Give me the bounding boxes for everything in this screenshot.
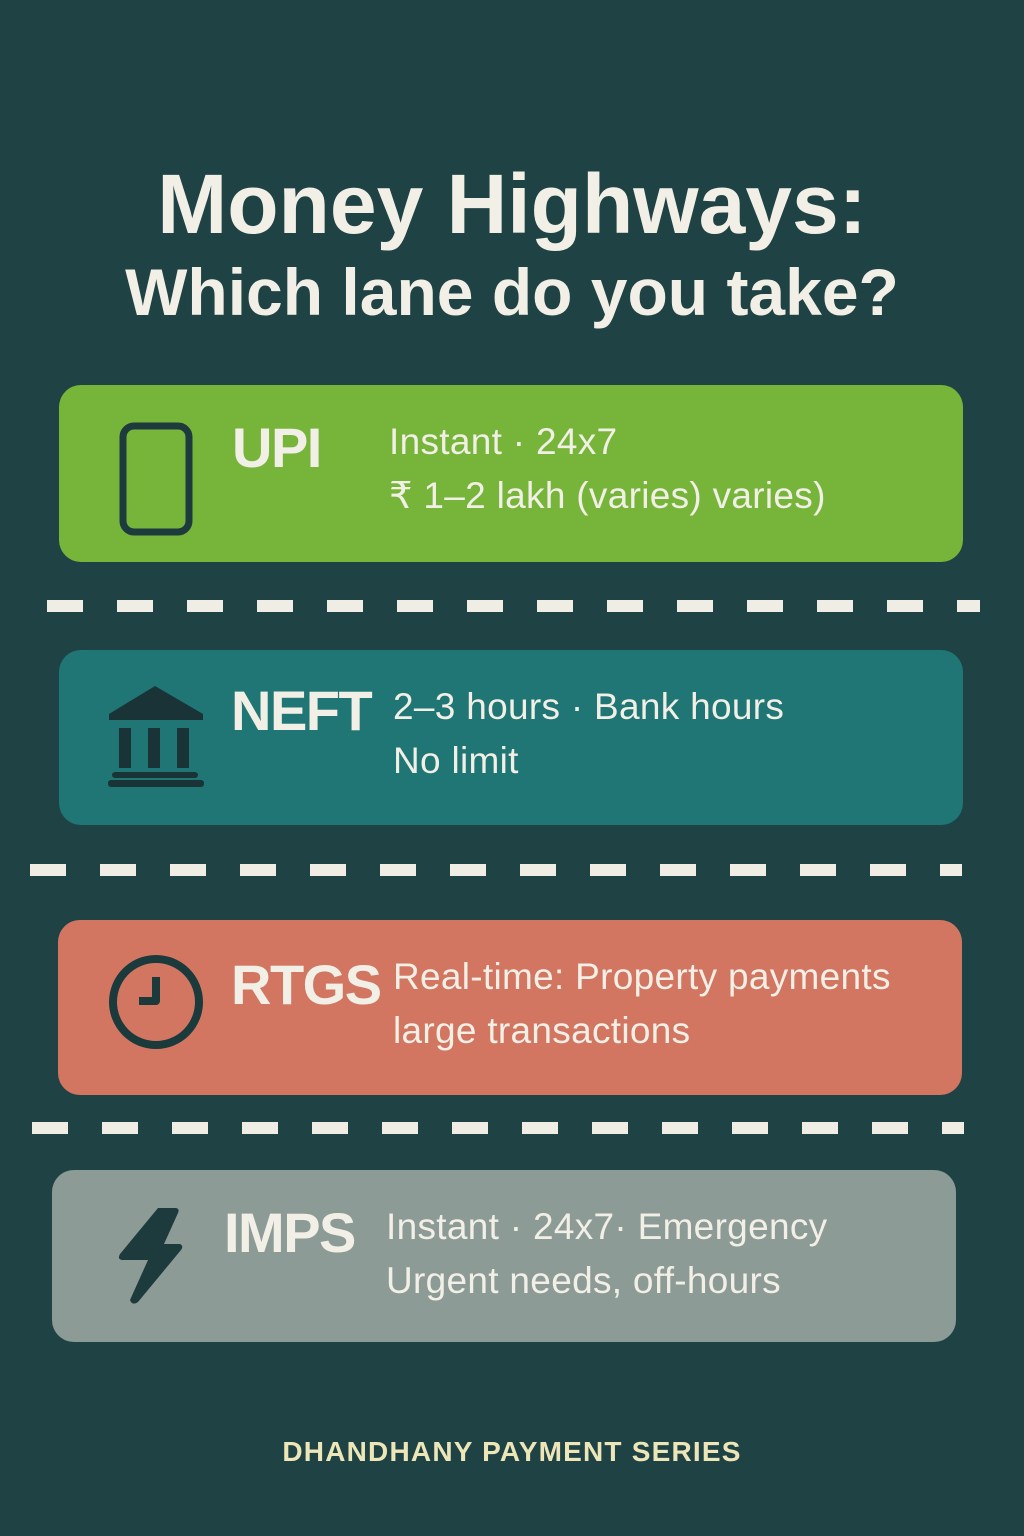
icon: phone [120, 422, 192, 536]
road dashes [32, 1122, 964, 1134]
title: Which lane do you take? [125, 255, 899, 329]
details NEFT [393, 686, 784, 781]
details RTGS [393, 956, 891, 1051]
label IMPS: IMPS [224, 1201, 355, 1264]
icon: clock [109, 955, 203, 1049]
road dashes [47, 600, 980, 612]
panel: UPI [59, 385, 963, 562]
details UPI: ₹ 1–2 lakh (varies) varies) [389, 475, 826, 516]
details NEFT: 2–3 hours · Bank hours [393, 686, 784, 727]
details RTGS: Real-time: Property payments [393, 956, 891, 997]
label NEFT: NEFT [231, 679, 371, 742]
details IMPS [386, 1206, 827, 1301]
title: Money Highways: [157, 157, 867, 251]
title [125, 157, 899, 329]
details UPI: Instant · 24x7 [389, 421, 617, 462]
road dashes [30, 864, 962, 876]
footer: DHANDHANY PAYMENT SERIES [282, 1436, 742, 1467]
panel: IMPS [52, 1170, 956, 1342]
details NEFT: No limit [393, 740, 519, 781]
details UPI [389, 421, 826, 516]
panel: RTGS [58, 920, 962, 1095]
details IMPS: Urgent needs, off-hours [386, 1260, 781, 1301]
details RTGS: large transactions [393, 1010, 690, 1051]
panel: NEFT [59, 650, 963, 825]
label RTGS: RTGS [231, 953, 381, 1016]
details IMPS: Instant · 24x7· Emergency [386, 1206, 827, 1247]
icon: bank [108, 686, 204, 787]
label UPI: UPI [232, 416, 321, 479]
icon: lightning [118, 1208, 182, 1304]
